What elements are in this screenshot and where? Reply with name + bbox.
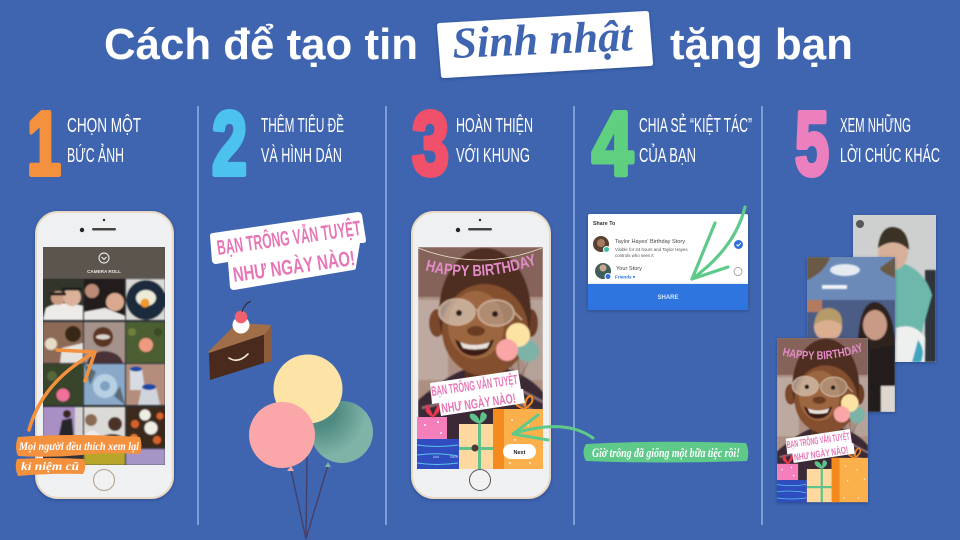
sticker: text card (210, 212, 366, 290)
step 1 heading: BỨC ẢNH (67, 144, 124, 167)
sticker: text card: NHƯ NGÀY NÀO! (231, 247, 356, 287)
collage: middle story (807, 257, 895, 412)
title (104, 11, 853, 78)
callout: green note (584, 442, 748, 462)
step 3 heading: HOÀN THIỆN (456, 114, 533, 137)
step 5 heading: 5 (795, 94, 829, 194)
sticker on photo: BẠN TRÔNG VẪN TUYỆT (430, 372, 519, 399)
step 1 heading: 1 (27, 94, 61, 194)
step 4 heading: 4 (592, 94, 633, 194)
toolbar labels (433, 444, 478, 459)
collage: front story (776, 337, 869, 504)
step 4 heading: CHIA SẺ “KIỆT TÁC” (639, 114, 752, 137)
share button: SHARE (657, 295, 679, 301)
step 4 heading (592, 94, 752, 194)
option: your story (615, 266, 642, 280)
camera roll header: CAMERA ROLL (87, 269, 121, 274)
step 3 heading (412, 94, 533, 194)
step 2 heading (212, 94, 344, 194)
sticker on photo (430, 370, 525, 416)
callout: orange note: Mọi người đều thích xem lại (18, 439, 140, 453)
option: your story: Friends ▾ (615, 274, 636, 280)
title: highlighted word card: Sinh nhật (451, 11, 635, 68)
avatar: Taylor (593, 236, 610, 252)
option: birthday story (615, 239, 688, 258)
icon: balloons (249, 354, 373, 539)
column dividers (198, 106, 762, 525)
collage: back story (853, 215, 936, 362)
arrow: green to share card (692, 207, 745, 279)
share button (588, 284, 748, 310)
step 3 heading: 3 (412, 94, 449, 194)
toolbar labels: Save (450, 455, 458, 459)
step 2 heading: THÊM TIÊU ĐỀ (261, 114, 344, 137)
panel: share card: Share To (593, 221, 616, 227)
option: birthday story: controls who sees it (615, 253, 654, 258)
callout: orange note: kỉ niệm cũ (21, 459, 79, 473)
sticker on photo: NHƯ NGÀY NÀO! (793, 445, 849, 464)
option: birthday story: Taylor Hayes' Birthday Story (615, 239, 685, 245)
check mark (734, 240, 743, 249)
callout: orange note (16, 435, 141, 476)
next button (503, 444, 536, 459)
camera roll header (43, 247, 165, 279)
step 1 heading (27, 94, 141, 194)
step 2 heading: 2 (212, 94, 247, 194)
panel: share card (588, 214, 748, 310)
step 5 heading (795, 94, 940, 194)
callout: green note: Giờ trông đã giống một bữa tiệc rồi! (592, 445, 740, 460)
option: your story: Your Story (616, 266, 642, 272)
step 3 heading: VỚI KHUNG (456, 144, 530, 167)
option: birthday story: Visible for 24 hours and Taylor Hayes (615, 247, 688, 252)
step 2 heading: VÀ HÌNH DÁN (261, 144, 342, 167)
arrow: orange (29, 350, 95, 430)
photo with balloons (418, 247, 543, 439)
icon: cake slice (208, 301, 272, 380)
title: right text: tặng bạn (670, 20, 853, 69)
step 1 heading: CHỌN MỘT (67, 114, 141, 137)
sticker on photo: NHƯ NGÀY NÀO! (440, 391, 517, 416)
photo grid (43, 279, 166, 465)
banner: HAPPY BIRTHDAY (426, 254, 534, 276)
phone 1: camera roll (16, 212, 173, 498)
phone 3: framed story (410, 211, 552, 501)
sticker on photo: BẠN TRÔNG VẪN TUYỆT (786, 430, 850, 451)
title: left text: Cách để tạo tin (104, 20, 418, 69)
avatar: your story (595, 263, 611, 280)
arrow: green to gifts (513, 415, 593, 440)
banner: HAPPY BIRTHDAY (782, 342, 862, 360)
step 4 heading: CỦA BẠN (639, 143, 696, 167)
gift boxes (417, 396, 543, 469)
sticker on photo (786, 429, 855, 464)
sticker: text card: BẠN TRÔNG VẪN TUYỆT (215, 216, 362, 260)
next button: Next (514, 450, 526, 456)
radio button (734, 268, 742, 276)
toolbar labels: Add (433, 455, 439, 459)
